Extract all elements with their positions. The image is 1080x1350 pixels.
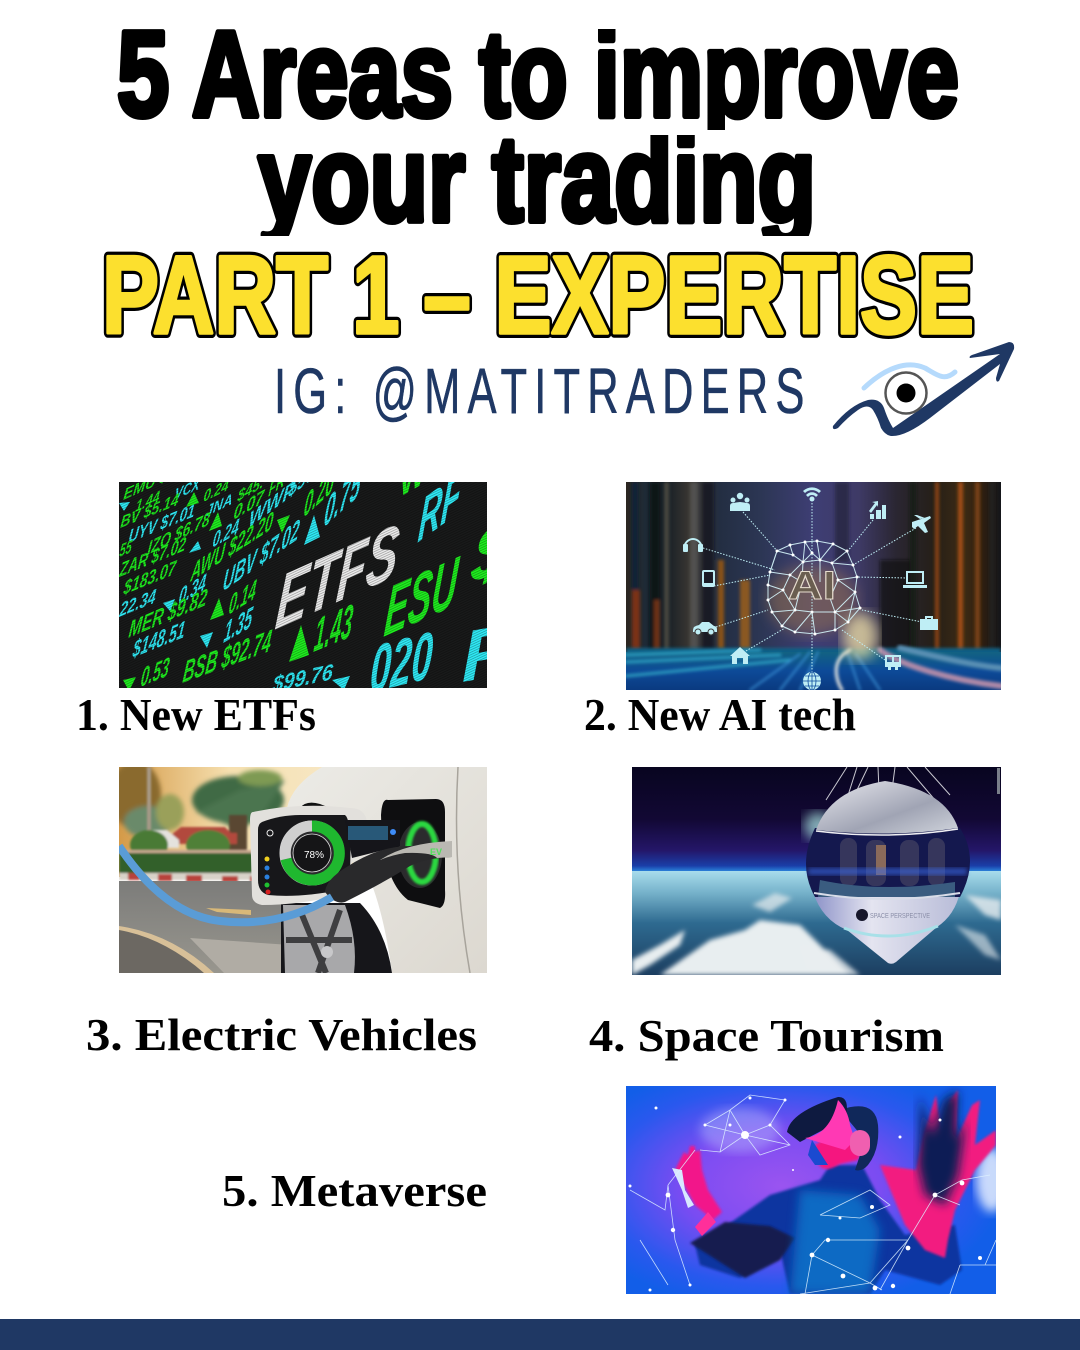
photo: space tourism capsule (632, 767, 1001, 975)
watermark strip (997, 768, 1000, 794)
photo: ETF ticker board: $183.07 (122, 557, 178, 600)
photo: ETF ticker board: 55 (119, 536, 134, 561)
caption: New AI tech: 2. New AI tech (584, 690, 856, 740)
photo: electric vehicle charging: EV (430, 847, 442, 857)
logo: eye and rising arrow (832, 342, 1014, 436)
photo: ETF ticker board: JNA (204, 490, 234, 521)
photo: ETF ticker board: 1.35 (222, 600, 255, 650)
car body (287, 767, 487, 973)
charging plug (325, 846, 452, 903)
left hand (675, 1146, 722, 1220)
photo: ETF ticker board: 0.34 (177, 569, 208, 611)
figure torso (695, 1165, 962, 1294)
capsule window band (806, 828, 970, 897)
network lines and nodes (630, 1095, 996, 1294)
photo: ETF ticker board: 1.44 (134, 488, 161, 516)
charge port (381, 799, 445, 908)
balloon ropes (826, 767, 950, 805)
caption: Electric Vehicles: 3. Electric Vehicles (86, 1009, 477, 1060)
photo: ETF ticker board: MER $9.82 (127, 584, 209, 644)
brain mesh (768, 541, 860, 634)
title (118, 29, 958, 236)
photo: ETF ticker board: BV $5.14 (119, 489, 180, 532)
charger screen (250, 806, 367, 905)
head and headset (815, 1130, 865, 1169)
photo: metaverse VR user (626, 1086, 996, 1294)
capsule hull bottom (813, 892, 960, 964)
photo: ETF ticker board: ZAR $7.02 (119, 533, 188, 582)
wheel (281, 903, 392, 973)
title: your trading (258, 111, 816, 245)
photo: ETF ticker board (119, 482, 487, 688)
photo: ETF ticker board: 0.24 (211, 514, 241, 553)
photo: electric vehicle charging (119, 767, 487, 973)
photo: space tourism capsule: SPACE PERSPECTIVE (870, 913, 930, 920)
footer bar (0, 1319, 1080, 1350)
raised right hand (880, 1090, 996, 1258)
dotted connectors (703, 500, 922, 680)
network icons (683, 487, 938, 690)
photo: ETF ticker board: 0.14 (227, 573, 258, 622)
caption: Metaverse: 5. Metaverse (222, 1165, 487, 1215)
caption: Space Tourism: 4. Space Tourism (589, 1010, 944, 1061)
photo: ETF ticker board: BSB $92.74 (181, 622, 274, 688)
photo: AI brain network (626, 482, 1001, 690)
photo: ETF ticker board: 1.43 (312, 594, 355, 663)
photo: electric vehicle charging: 78% (304, 850, 324, 861)
photo: ETF ticker board: $148.51 (131, 616, 187, 664)
capsule dome (816, 781, 958, 834)
caption: New ETFs: 1. New ETFs (76, 690, 316, 740)
photo: ETF ticker board: 22.34 (119, 586, 157, 622)
charging cable (119, 846, 332, 922)
photo: ETF ticker board: 0.07 (232, 486, 266, 525)
handle: IG @MATITRADERS: IG: @MATITRADERS (274, 355, 804, 427)
photo: ETF ticker board: UYV $7.01 (127, 501, 196, 548)
photo: ETF ticker board: IZO $6.78 (146, 508, 211, 560)
photo: AI brain network: AI (788, 564, 836, 608)
